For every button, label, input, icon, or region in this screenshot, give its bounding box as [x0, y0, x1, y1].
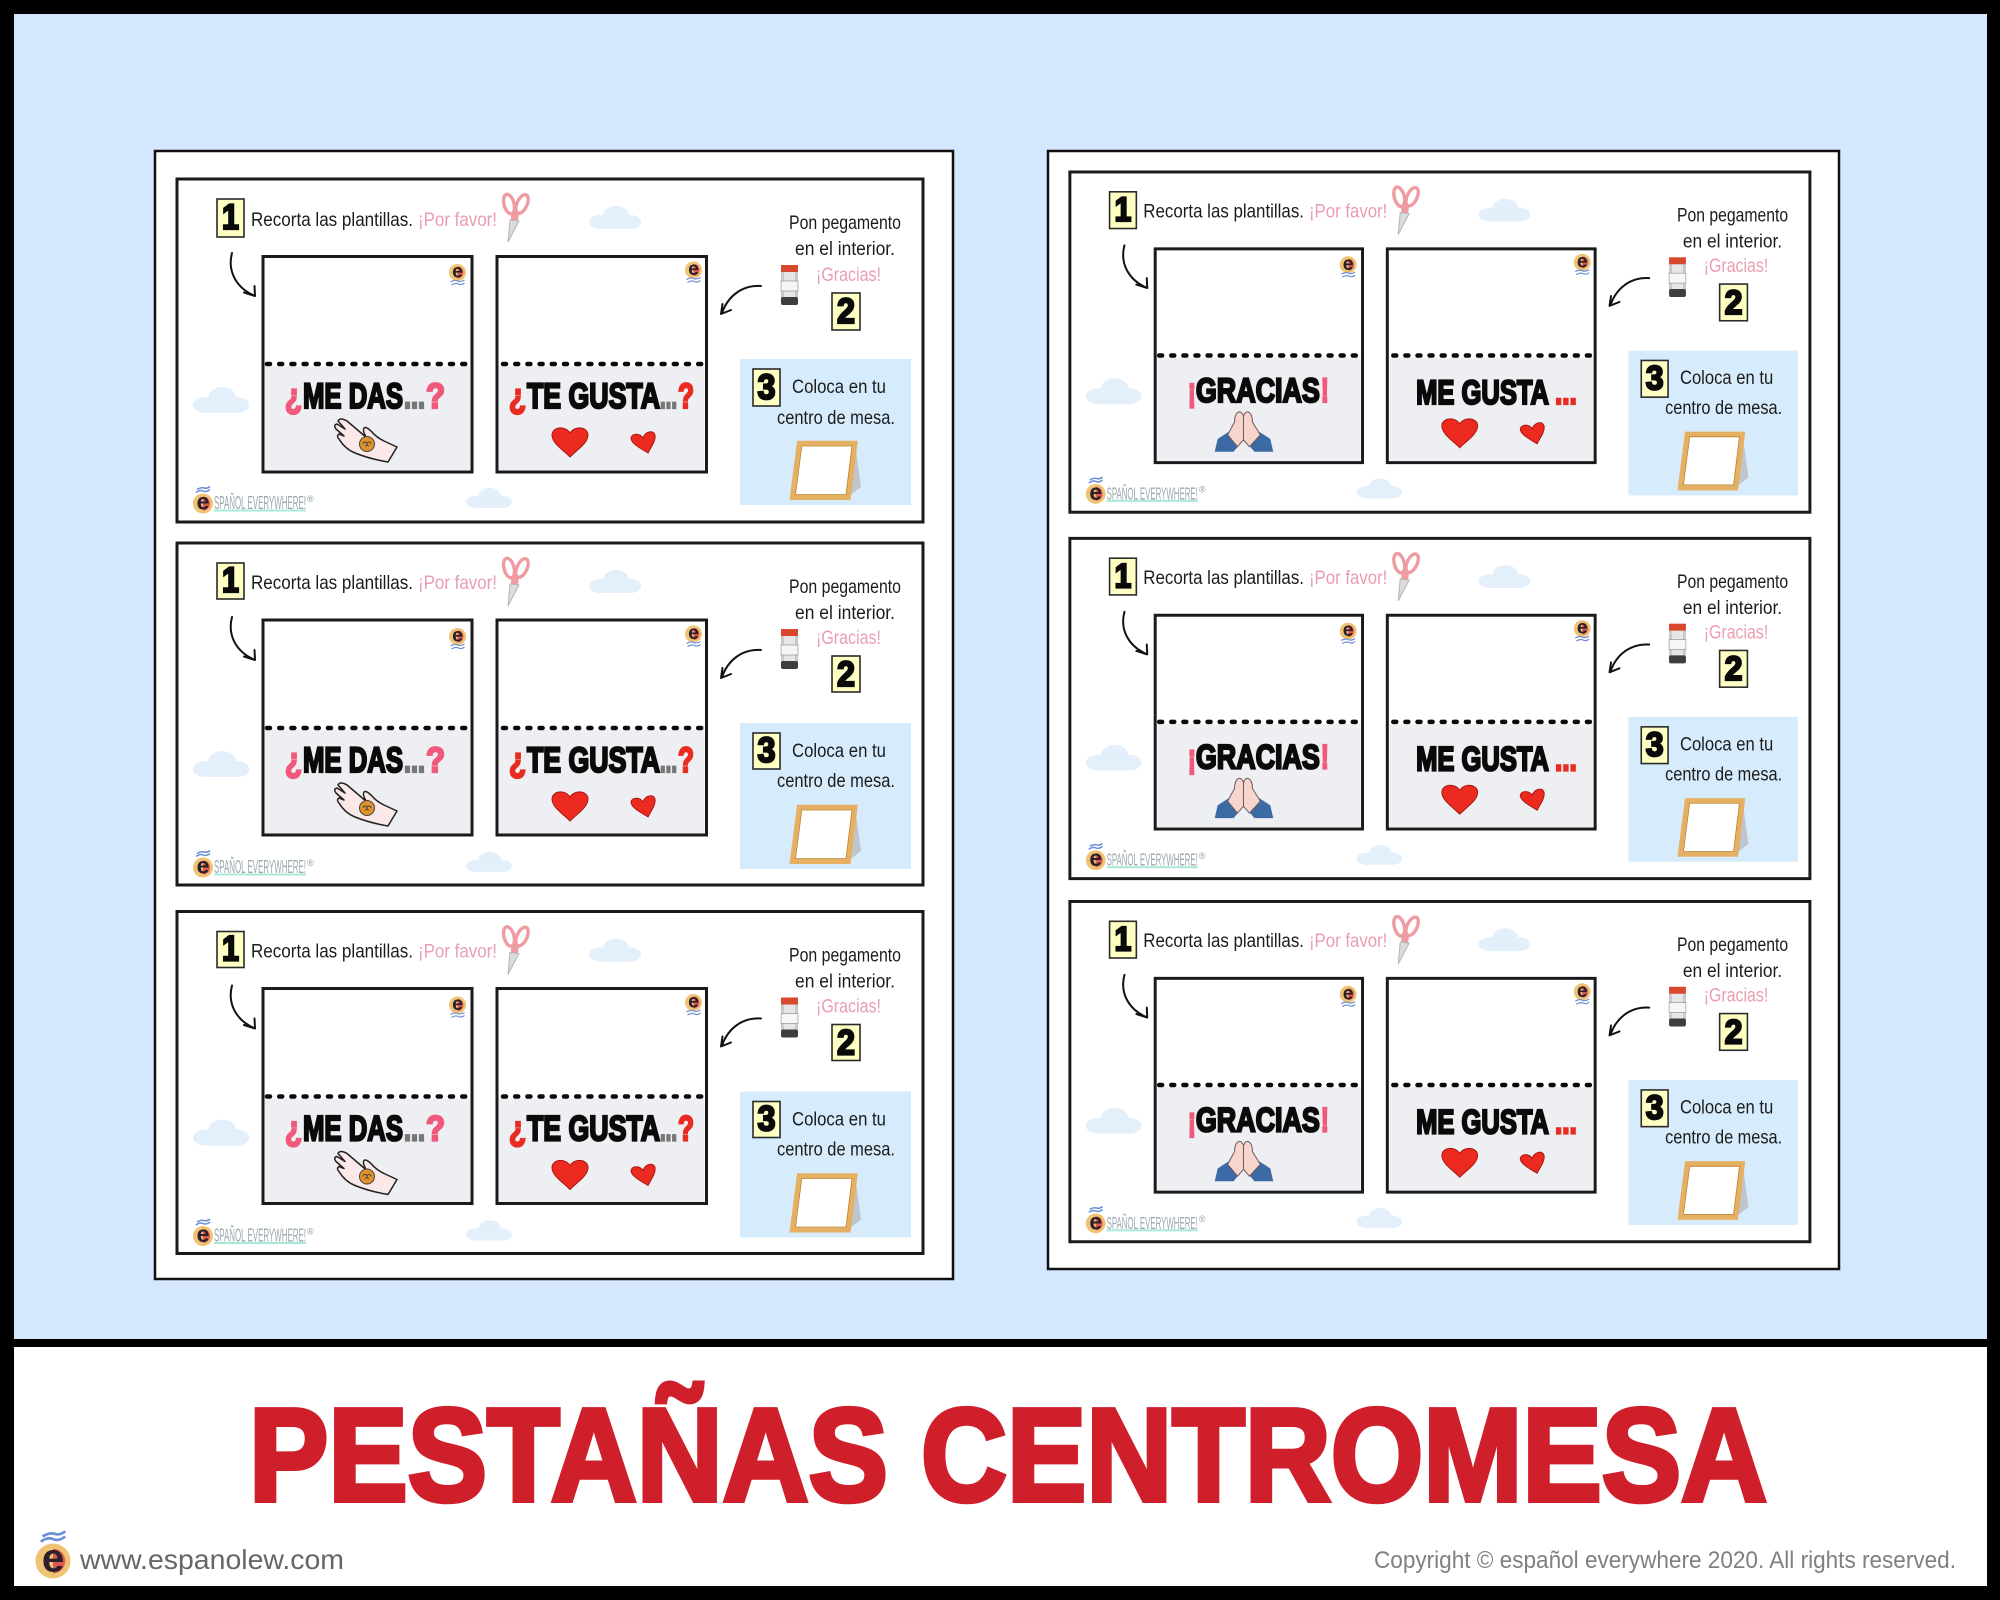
card text: gracias: !	[1321, 1102, 1329, 1140]
step 2 badge: 2	[1725, 1013, 1742, 1051]
step 2 badge: 2	[837, 655, 855, 694]
por favor: ¡Por favor!	[418, 572, 497, 594]
arrow from glue	[1610, 1008, 1649, 1035]
brand logo	[1086, 843, 1206, 871]
step 2 instructions: Pon pegamento	[1677, 934, 1788, 956]
brand logo: ®	[307, 858, 314, 868]
icon: glue	[781, 265, 798, 305]
brand logo	[193, 1219, 314, 1247]
step 2 instructions: en el interior.	[795, 970, 895, 992]
step 2 instructions: Pon pegamento	[1677, 571, 1788, 593]
panel: right card 2: SPAÑOL EVERYWHERE!	[1107, 849, 1198, 870]
card text: te gusta: TE GUSTA	[527, 741, 660, 780]
card text: gracias: ¡	[1188, 739, 1196, 777]
step 2 instructions	[1677, 934, 1788, 1007]
step 3 box: centro de mesa.	[1665, 397, 1782, 419]
brand logo: ®	[1199, 851, 1206, 861]
icon: scissors	[502, 557, 531, 606]
step 3 box	[1628, 717, 1798, 862]
step 3 box	[740, 723, 911, 869]
step 2 instructions: ¡Gracias!	[816, 996, 881, 1018]
step 3 box: Coloca en tu	[792, 376, 886, 398]
brand logo	[193, 486, 314, 514]
step 1 badge: 1	[1115, 191, 1131, 229]
step 2 instructions: en el interior.	[1683, 960, 1782, 982]
panel: right card 1	[1070, 172, 1810, 512]
brand logo	[1086, 477, 1206, 505]
step 2 instructions	[1677, 205, 1788, 277]
card text: me gusta: ...	[1555, 374, 1577, 412]
panel: right card 3: SPAÑOL EVERYWHERE!	[1107, 1212, 1198, 1233]
template card B	[1387, 978, 1595, 1192]
panel: right sheet	[1048, 151, 1839, 1269]
card text: me das: ME DAS	[303, 377, 403, 416]
icon: website logo	[36, 1531, 70, 1580]
card text: te gusta: ...	[660, 741, 677, 780]
template card B	[1387, 615, 1595, 829]
step 3 box	[1628, 351, 1798, 495]
step 2 badge	[832, 292, 860, 331]
step 2 badge: 2	[1725, 284, 1742, 322]
step 2 instructions: ¡Gracias!	[1704, 255, 1768, 277]
panel: right card 2	[1070, 538, 1810, 879]
card text: me das: ¿	[285, 1110, 302, 1148]
step 3 box: 3	[1646, 360, 1664, 398]
step 1 text: Recorta las plantillas.	[251, 572, 413, 594]
arrow from glue	[1610, 644, 1649, 672]
step 3 box: centro de mesa.	[777, 1138, 895, 1160]
step 3 box: 3	[1646, 726, 1664, 764]
step 2 badge: 2	[837, 292, 855, 331]
icon: praying hands	[1215, 1141, 1273, 1181]
por favor: ¡Por favor!	[1309, 930, 1387, 952]
por favor: ¡Por favor!	[1309, 567, 1387, 589]
arrow to template	[231, 253, 255, 296]
arrow to template	[1123, 612, 1147, 654]
copyright: Copyright © español everywhere 2020. All rights reserved.	[1374, 1547, 1956, 1574]
step 1 badge: 1	[222, 930, 239, 968]
brand logo: ®	[307, 1226, 314, 1236]
card text: me das: ME DAS	[303, 1110, 403, 1148]
step 2 instructions: ¡Gracias!	[816, 627, 881, 649]
step 2 instructions: ¡Gracias!	[1704, 622, 1768, 644]
step 3 box: centro de mesa.	[777, 770, 895, 792]
step 2 instructions: ¡Gracias!	[816, 264, 881, 286]
icon: glue	[781, 998, 798, 1038]
step 3 box: 3	[758, 368, 776, 407]
step 2 badge	[832, 655, 860, 694]
icon: scissors	[1392, 552, 1421, 601]
step 1 text: Recorta las plantillas.	[251, 940, 413, 962]
step 1 text: Recorta las plantillas.	[1143, 567, 1304, 589]
template card B	[497, 256, 706, 472]
icon: glue	[1669, 257, 1686, 297]
step 2 badge	[832, 1024, 860, 1062]
icon: glue	[1669, 624, 1686, 663]
icon: scissors	[1392, 915, 1421, 964]
template card A	[263, 620, 472, 835]
website url: www.espanolew.com	[79, 1544, 344, 1575]
arrow to template	[231, 617, 255, 660]
step 2 instructions: Pon pegamento	[1677, 205, 1788, 227]
card text: te gusta: TE GUSTA	[527, 1110, 660, 1148]
step 3 box: 3	[758, 1100, 776, 1138]
brand logo: ®	[307, 494, 314, 504]
arrow to template	[1123, 975, 1147, 1018]
step 2 badge	[1720, 284, 1747, 322]
panel: right card 3	[1070, 901, 1810, 1242]
por favor: ¡Por favor!	[1309, 201, 1387, 223]
por favor: ¡Por favor!	[418, 940, 497, 962]
step 1 badge: 1	[222, 198, 239, 237]
card text: me gusta: ...	[1555, 740, 1577, 778]
panel: left sheet	[155, 151, 953, 1279]
step 1 text: Recorta las plantillas.	[1143, 201, 1304, 223]
card text: me gusta: ME GUSTA	[1416, 740, 1549, 778]
step 2 instructions: en el interior.	[795, 602, 895, 624]
step 2 instructions	[1677, 571, 1788, 644]
card text: te gusta: ?	[678, 741, 694, 780]
card text: te gusta: TE GUSTA	[527, 377, 660, 416]
step 1 badge: 1	[1115, 921, 1131, 959]
step 3 box: centro de mesa.	[1665, 1127, 1782, 1149]
card text: me das: ...	[404, 1110, 425, 1148]
card text: te gusta: ...	[660, 1110, 677, 1148]
step 2 badge	[1720, 1013, 1747, 1051]
card text: me gusta: ...	[1555, 1104, 1577, 1142]
arrow from glue	[721, 1018, 761, 1046]
template card A	[263, 256, 472, 472]
card text: te gusta: ¿	[509, 377, 526, 416]
step 2 instructions: en el interior.	[1683, 597, 1782, 619]
step 1 badge: 1	[222, 561, 239, 600]
step 3 box	[1628, 1080, 1798, 1225]
title: PESTAÑAS CENTROMESA	[249, 1382, 1767, 1528]
step 3 box: Coloca en tu	[792, 740, 886, 762]
step 2 badge: 2	[1725, 650, 1742, 688]
template card A	[1155, 249, 1363, 463]
card text: gracias: ¡	[1188, 372, 1196, 410]
card text: me das: ?	[426, 741, 445, 780]
step 3 box: Coloca en tu	[1680, 734, 1773, 756]
card text: te gusta: ¿	[509, 741, 526, 780]
arrow to template	[1123, 245, 1147, 288]
step 2 instructions: en el interior.	[1683, 230, 1782, 252]
card text: me das: ...	[404, 377, 425, 416]
por favor: ¡Por favor!	[418, 209, 497, 231]
card text: gracias: GRACIAS	[1196, 739, 1320, 777]
step 3 box: Coloca en tu	[1680, 367, 1773, 389]
step 2 instructions	[789, 576, 901, 649]
panel: left card 1: SPAÑOL EVERYWHERE!	[214, 492, 306, 513]
template card B	[1387, 249, 1595, 463]
step 2 instructions: Pon pegamento	[789, 576, 901, 598]
arrow from glue	[721, 650, 761, 678]
step 2 instructions: en el interior.	[795, 238, 895, 260]
icon: scissors	[502, 193, 531, 242]
icon: scissors	[502, 925, 531, 974]
step 2 badge	[1720, 650, 1747, 688]
step 2 instructions: Pon pegamento	[789, 944, 901, 966]
arrow to template	[231, 986, 255, 1028]
step 3 box	[740, 1092, 911, 1238]
template card B	[497, 988, 706, 1204]
step 1 text: Recorta las plantillas.	[251, 209, 413, 231]
card text: me gusta: ME GUSTA	[1416, 1104, 1549, 1142]
step 3 box	[740, 359, 911, 505]
step 2 instructions	[789, 944, 901, 1018]
card text: me das: ¿	[285, 377, 302, 416]
brand logo	[193, 850, 314, 878]
brand logo: ®	[1199, 484, 1206, 494]
panel: left card 3: SPAÑOL EVERYWHERE!	[214, 1224, 306, 1246]
card text: me das: ME DAS	[303, 741, 403, 780]
panel: left card 1	[177, 179, 923, 522]
card text: me das: ?	[426, 1110, 445, 1148]
step 3 box: 3	[758, 731, 776, 770]
template card A	[1155, 615, 1363, 829]
step 1 text: Recorta las plantillas.	[1143, 930, 1304, 952]
panel: right card 1: SPAÑOL EVERYWHERE!	[1107, 482, 1198, 503]
step 3 box: 3	[1646, 1089, 1664, 1127]
step 2 instructions: Pon pegamento	[789, 212, 901, 234]
step 1 badge: 1	[1115, 557, 1131, 595]
step 3 box: Coloca en tu	[1680, 1097, 1773, 1119]
card text: me das: ...	[404, 741, 425, 780]
step 3 box: centro de mesa.	[1665, 763, 1782, 785]
card text: gracias: !	[1321, 372, 1329, 410]
step 2 instructions: ¡Gracias!	[1704, 985, 1768, 1007]
template card A	[263, 988, 472, 1204]
icon: glue	[1669, 987, 1686, 1026]
card text: gracias: ¡	[1188, 1102, 1196, 1140]
panel: left card 3	[177, 912, 923, 1254]
arrow from glue	[721, 286, 761, 314]
icon: praying hands	[1215, 412, 1273, 452]
title band	[14, 1347, 1987, 1586]
card text: te gusta: ?	[678, 377, 694, 416]
card text: gracias: GRACIAS	[1196, 372, 1320, 410]
arrow from glue	[1610, 278, 1649, 306]
step 2 instructions	[789, 212, 901, 286]
card text: me das: ¿	[285, 741, 302, 780]
step 3 box: centro de mesa.	[777, 407, 895, 429]
icon: glue	[781, 629, 798, 669]
brand logo	[1086, 1207, 1206, 1234]
step 3 box: Coloca en tu	[792, 1108, 886, 1130]
panel: left card 2: SPAÑOL EVERYWHERE!	[214, 856, 306, 877]
card text: gracias: GRACIAS	[1196, 1102, 1320, 1140]
step 2 badge: 2	[837, 1024, 855, 1062]
template card A	[1155, 978, 1363, 1192]
card text: gracias: !	[1321, 739, 1329, 777]
panel: left card 2	[177, 543, 923, 885]
card text: te gusta: ¿	[509, 1110, 526, 1148]
card text: te gusta: ...	[660, 377, 677, 416]
card text: me das: ?	[426, 377, 445, 416]
icon: scissors	[1392, 186, 1421, 234]
card text: te gusta: ?	[678, 1110, 694, 1148]
card text: me gusta: ME GUSTA	[1416, 374, 1549, 412]
template card B	[497, 620, 706, 835]
icon: praying hands	[1215, 778, 1273, 818]
brand logo: ®	[1199, 1214, 1206, 1224]
